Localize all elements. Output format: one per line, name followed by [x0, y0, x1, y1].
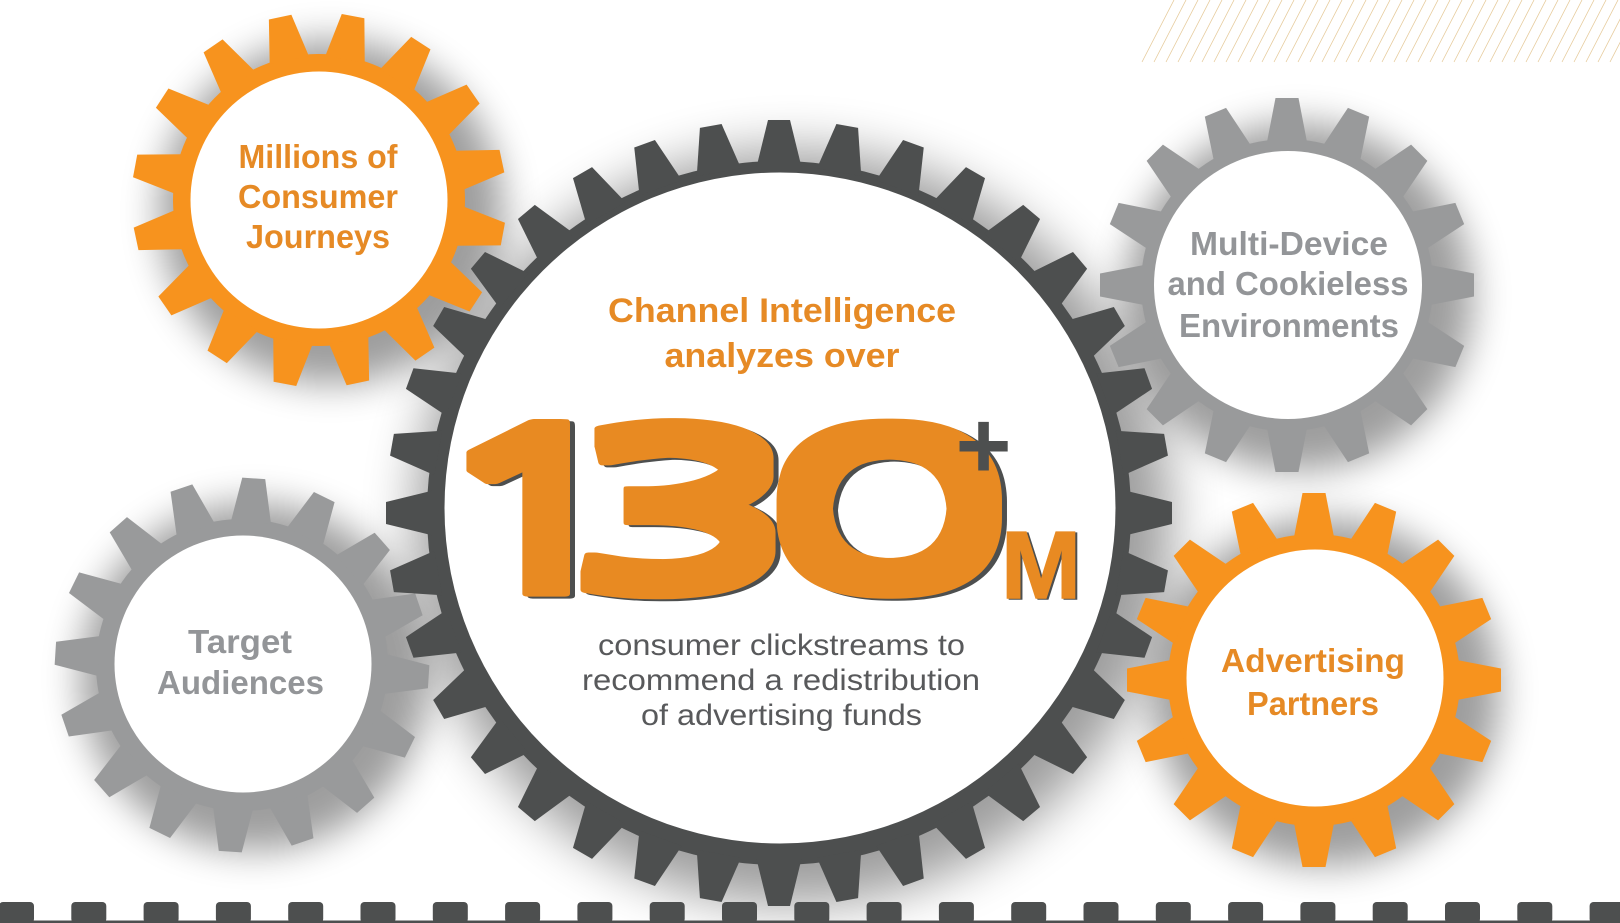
central gear — [386, 120, 1172, 906]
gear: Millions of Consumer Journeys: Consumer — [238, 178, 398, 215]
big number: 130 — [419, 411, 1021, 620]
gear: Millions of Consumer Journeys — [101, 0, 537, 418]
gear: Multi-Device and Cookieless Environments — [1100, 98, 1474, 472]
bottom gear rack — [0, 902, 1620, 923]
heading: Channel Intelligence analyzes over: Channel Intelligence — [608, 292, 956, 330]
gear: Advertising Partners: Advertising — [1221, 642, 1405, 679]
gear: Target Audiences: Audiences — [157, 664, 324, 701]
plus sign: + — [955, 392, 1012, 499]
gear: Advertising Partners: Partners — [1247, 685, 1379, 722]
gear: Target Audiences: Target — [188, 623, 292, 660]
big number: 130: 0 — [755, 412, 1021, 620]
description text: consumer clickstreams to — [598, 629, 965, 662]
gear: Multi-Device and Cookieless Environments: and Cookieless — [1168, 265, 1408, 302]
gear: Target Audiences — [44, 467, 440, 863]
million unit: M: M — [1001, 512, 1081, 619]
gear: Multi-Device and Cookieless Environments: Environments — [1179, 307, 1399, 344]
description text — [582, 629, 980, 732]
description text: of advertising funds — [641, 699, 922, 732]
gear: Millions of Consumer Journeys: Millions of — [238, 138, 398, 175]
million unit: M: M — [1003, 513, 1083, 620]
decorative hatch pattern — [1142, 0, 1620, 62]
gear: Multi-Device and Cookieless Environments: Multi-Device — [1190, 225, 1388, 262]
description text: recommend a redistribution — [582, 664, 980, 697]
gear: Advertising Partners — [1127, 493, 1501, 867]
gear: Millions of Consumer Journeys: Journeys — [246, 218, 390, 255]
heading: Channel Intelligence analyzes over: analyzes over — [664, 337, 900, 375]
big number: 130: 3 — [560, 412, 805, 620]
big number: 130: 1 — [419, 411, 655, 619]
heading: Channel Intelligence analyzes over — [608, 292, 956, 375]
